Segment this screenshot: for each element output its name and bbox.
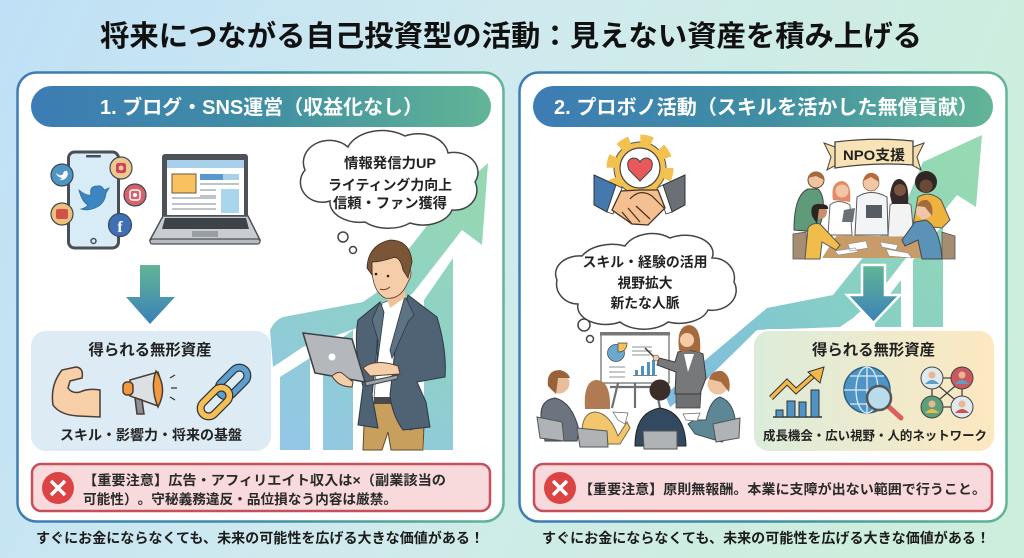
panel 2 frame	[520, 72, 1006, 522]
thought bubble: skill use: 視野拡大	[618, 275, 672, 291]
footer text right: すぐにお金にならなくても、未来の可能性を広げる大きな価値がある！	[542, 530, 990, 546]
icon: people network	[921, 367, 973, 418]
presenter	[645, 325, 706, 408]
illustration: NPO team	[793, 139, 955, 259]
thought bubble: skills gained: 信頼・ファン獲得	[333, 195, 447, 211]
thought bubble: skills gained: ライティング力向上	[328, 177, 452, 193]
table	[822, 235, 928, 258]
header pill: 2. プロボノ活動（スキルを活かした無償貢献）	[554, 96, 978, 119]
audience member 2	[577, 380, 630, 447]
panel: intangible assets	[754, 331, 994, 451]
title: 将来につながる自己投資型の活動：見えない資産を積み上げる	[100, 19, 922, 53]
illustration: presentation	[537, 325, 740, 449]
icon: gear, heart and handshake	[594, 139, 685, 225]
panel: intangible assets: スキル・影響力・将来の基盤	[60, 427, 242, 443]
audience member 4	[683, 371, 740, 442]
person with tablet	[855, 192, 888, 235]
panel: intangible assets: 得られる無形資産	[812, 340, 935, 359]
person in yellow with afro	[913, 194, 950, 228]
person with dark hair	[888, 201, 914, 237]
callout: warning: 【重要注意】原則無報酬。本業に支障が出ない範囲で行うこと。	[579, 481, 986, 497]
person in white with red hair	[828, 202, 852, 235]
thought bubble: skill use: 新たな人脈	[610, 295, 680, 311]
panel 1 frame	[18, 72, 504, 522]
panel: intangible assets	[31, 331, 271, 451]
thought bubble: skill use	[556, 234, 736, 342]
header pill	[533, 86, 993, 127]
person in green	[794, 189, 823, 232]
panel: intangible assets: 成長機会・広い視野・人的ネットワーク	[763, 428, 987, 443]
header pill: 1. ブログ・SNS運営（収益化なし）	[100, 95, 423, 119]
icon: growth chart	[771, 367, 824, 417]
panel: intangible assets: 得られる無形資産	[88, 340, 212, 359]
callout: warning: 可能性）。守秘義務違反・品位損なう内容は厳禁。	[83, 491, 397, 507]
callout: warning	[534, 464, 992, 511]
banner: NPO support	[824, 139, 924, 170]
callout: warning: 【重要注意】広告・アフィリエイト収入は×（副業該当の	[83, 472, 446, 488]
icon: smartphone with social badges: f	[117, 219, 123, 236]
thought bubble: skills gained	[300, 131, 478, 254]
arrow: down to assets	[126, 265, 175, 324]
audience member 1	[537, 370, 579, 441]
whiteboard	[600, 332, 670, 408]
panel: pro bono	[520, 72, 1006, 522]
thought bubble: skill use: スキル・経験の活用	[582, 254, 708, 270]
icon: smartphone with social badges	[51, 152, 146, 248]
seated person left	[805, 224, 840, 259]
illustration: man with laptop	[303, 240, 445, 450]
seated person right	[902, 220, 942, 259]
header pill	[31, 86, 491, 127]
icon: megaphone	[123, 371, 177, 414]
growth arrow behind person	[270, 163, 488, 450]
thought bubble: skills gained: 情報発信力UP	[344, 155, 436, 171]
callout: warning	[32, 464, 490, 511]
panel: blog and SNS	[18, 72, 504, 522]
icon: chain link	[197, 364, 251, 420]
audience member 3	[635, 380, 686, 449]
icon: globe and magnifier	[844, 367, 901, 418]
footer text left: すぐにお金にならなくても、未来の可能性を広げる大きな価値がある！	[36, 530, 484, 546]
icon: laptop with web page	[150, 154, 260, 244]
icon: flexed arm	[52, 367, 100, 417]
banner: NPO support: NPO支援	[843, 147, 905, 163]
papers	[835, 241, 912, 258]
growth arrow behind team	[665, 135, 982, 407]
arrow: down to assets	[847, 265, 900, 323]
